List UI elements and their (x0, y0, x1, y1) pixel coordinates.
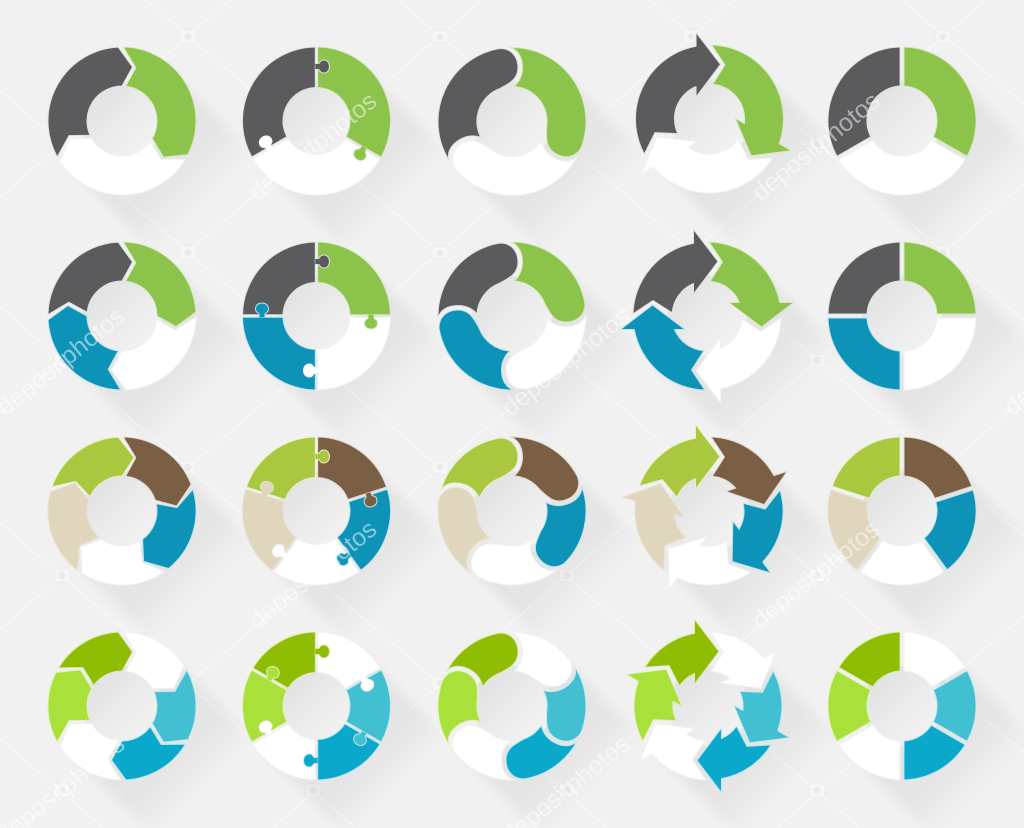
segment: gray (242, 242, 315, 315)
watermark text: depositphotos (497, 302, 635, 422)
segment: lime (246, 422, 327, 506)
arrow: dark green (645, 610, 727, 695)
segment: blue (127, 489, 214, 575)
segment: teal (138, 670, 217, 751)
segment: beige (23, 474, 118, 570)
row 2, ring 3: four-part rounded ring (438, 242, 645, 449)
segment: white (60, 724, 121, 780)
row 3, ring 4: five-part arrow ring (602, 414, 842, 644)
segment: gray (801, 39, 932, 156)
segment: teal (333, 670, 412, 752)
segment: beige (802, 480, 893, 570)
segment: green (904, 242, 976, 314)
segment: green (510, 242, 585, 322)
segment: light green (806, 661, 884, 741)
segment: white (506, 314, 586, 389)
knob: blue (334, 549, 353, 568)
segment: green (318, 47, 391, 157)
segment: beige (216, 479, 309, 570)
segment: white (54, 104, 185, 222)
row 4, ring 2: six-part puzzle ring (221, 614, 449, 828)
segment: blue (521, 486, 603, 571)
segment: beige (414, 480, 508, 572)
row 1, ring 5: three-part plain ring (801, 39, 1024, 254)
row 4, ring 5: six-part plain ring (806, 614, 1024, 828)
segment: white (112, 317, 196, 390)
row 3, ring 3: five-part rounded ring (414, 425, 645, 644)
arrow: beige (602, 470, 703, 570)
segment: dark green (839, 614, 917, 695)
segment: white (904, 318, 976, 390)
arrow: green (712, 45, 791, 156)
segment: blue (915, 490, 994, 573)
segment: white (834, 105, 965, 222)
arrow: gray (605, 30, 740, 154)
row 1, ring 1: three-part chevron ring (21, 39, 255, 254)
segment: gray (21, 39, 153, 157)
watermark text: depositphotos (747, 87, 885, 207)
segment: lime (832, 422, 911, 505)
arrow: white (637, 103, 772, 227)
knob: gray (315, 60, 330, 73)
watermark text: depositphotos (244, 515, 382, 635)
knob: gray (315, 255, 330, 268)
row 4, ring 3: six-part rounded ring (418, 617, 645, 828)
segment: blue (439, 310, 514, 390)
arrow: brown (711, 437, 787, 505)
arrow: white (650, 517, 751, 617)
row 1, ring 3: three-part rounded ring (411, 40, 645, 254)
knob: light green (263, 664, 281, 683)
watermark text: depositphotos (747, 515, 885, 635)
knob: blue (256, 303, 268, 317)
arrow: blue (716, 490, 804, 583)
segment: brown (123, 437, 191, 506)
segment: blue (48, 306, 121, 390)
row 4, ring 4: six-part arrow ring (610, 610, 841, 828)
row 4, ring 1: six-part chevron ring (27, 615, 255, 828)
knob: blue (304, 754, 318, 767)
segment: blue (499, 714, 577, 795)
knob: teal (352, 729, 370, 748)
arrow: blue (689, 717, 771, 802)
segment: white (253, 724, 315, 780)
segment: gray (411, 40, 543, 160)
arrow: green (709, 242, 794, 327)
segment: white (248, 104, 380, 222)
segment: brown (510, 437, 579, 501)
segment: green (510, 47, 586, 157)
segment: blue (300, 716, 380, 798)
segment: light green (221, 660, 300, 742)
segment: teal (528, 667, 606, 748)
segment: dark green (447, 617, 525, 698)
segment: lime (441, 425, 523, 510)
row 3, ring 2: five-part puzzle ring (216, 422, 449, 644)
segment: light green (27, 661, 106, 742)
watermark text: depositphotos (244, 87, 382, 207)
knob: dark green (315, 645, 330, 658)
knob: green (364, 315, 378, 329)
knob: white (270, 542, 289, 561)
segment: white (318, 317, 390, 390)
row 1, ring 4: three-part arrow ring (605, 30, 842, 252)
segment: white (318, 632, 380, 688)
segment: brown (904, 437, 972, 498)
segment: dark green (253, 614, 333, 696)
segment: white (123, 632, 184, 688)
arrow: gray (633, 230, 718, 314)
segment: gray (48, 242, 132, 315)
row 2, ring 5: four-part plain ring (828, 242, 1024, 449)
segment: white (69, 516, 164, 611)
knob: white (257, 719, 276, 738)
arrow: blue (620, 305, 705, 390)
row 2, ring 4: four-part arrow ring (620, 230, 840, 449)
segment: blue (828, 318, 900, 390)
segment: dark green (59, 615, 138, 696)
segment: green (318, 242, 390, 315)
segment: white (452, 725, 514, 780)
segment: brown (318, 437, 386, 500)
row 3, ring 5: five-part plain ring (802, 422, 1024, 644)
segment: white (464, 518, 557, 610)
segment: white (853, 522, 944, 612)
row 3, ring 1: five-part chevron ring (23, 422, 255, 644)
segment: white (839, 725, 900, 780)
segment: blue (887, 717, 965, 798)
arrow: teal (724, 671, 806, 756)
row 2, ring 2: four-part puzzle ring (242, 242, 449, 449)
row 2, ring 1: four-part chevron ring (48, 242, 255, 449)
arrow: white (640, 724, 706, 780)
segment: gray (438, 243, 518, 318)
segment: green (123, 47, 196, 157)
arrow: lime (639, 414, 727, 507)
segment: blue (106, 716, 185, 797)
segment: white (904, 632, 965, 687)
knob: beige (258, 480, 275, 497)
arrow: light green (610, 656, 692, 741)
segment: blue (242, 317, 315, 390)
arrow: white (710, 632, 776, 688)
segment: light green (418, 664, 496, 745)
segment: lime (52, 422, 139, 508)
knob: brown (362, 491, 379, 509)
segment: green (123, 242, 196, 326)
knob: lime (315, 450, 330, 463)
row 1, ring 2: three-part puzzle ring (215, 39, 449, 254)
segment: teal (920, 671, 998, 751)
segment: white (445, 102, 577, 223)
knob: white (257, 134, 276, 153)
segment: white (267, 521, 359, 612)
segment: gray (828, 242, 900, 314)
knob: green (352, 144, 370, 163)
segment: white (510, 632, 572, 687)
knob: white (357, 674, 376, 693)
arrow: white (696, 318, 781, 402)
segment: gray (215, 39, 347, 157)
segment: green (904, 47, 976, 156)
knob: white (304, 364, 318, 377)
segment: blue (328, 489, 409, 574)
